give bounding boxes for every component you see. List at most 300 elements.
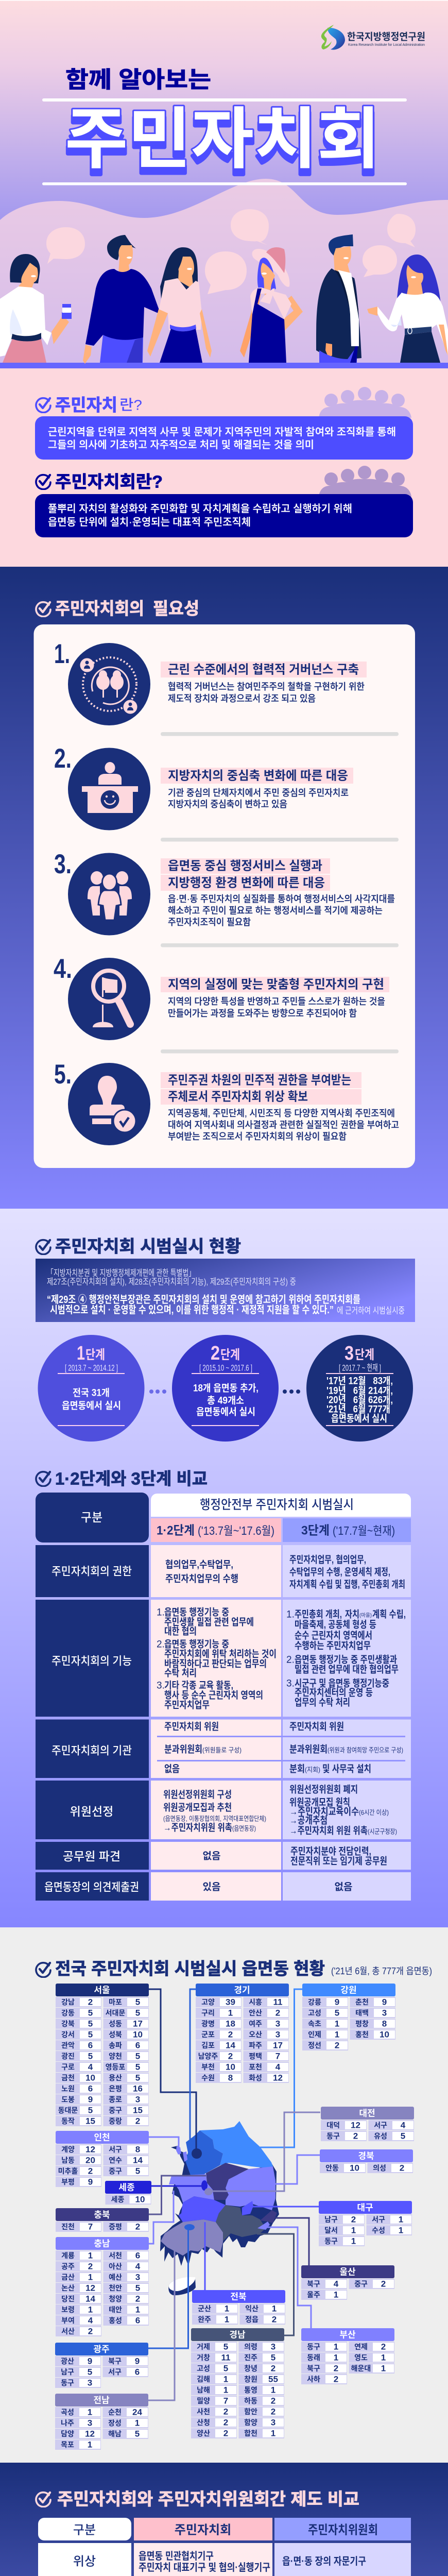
table: 서울: 용산 [109,2074,122,2082]
stage 1 circle: 읍면동에서 실시 [62,1400,121,1412]
table: 강원: 9 [335,1997,339,2007]
table: 충북: 진천 [61,2223,75,2231]
white card [34,624,415,1168]
table: 전북: 전북 [230,2292,247,2302]
row: right to submit opinions: 없음 [335,1882,352,1893]
table: 경남: 밀양 [197,2397,210,2405]
table: 경남: 2 [223,2417,228,2428]
item 2 [54,743,399,842]
table: 인천: 8 [135,2144,140,2155]
table: 대구: 대구 [357,2203,373,2212]
table: 경남: 5 [223,2364,228,2373]
table: 충남: 계룡 [61,2251,75,2260]
table: 인천: 5 [135,2166,140,2176]
table: 경기: 8 [228,2073,233,2082]
table: 인천: 부평 [61,2178,75,2186]
row: organs: (위원들로 구성) [202,1747,242,1754]
table: 경남: 합천 [244,2429,257,2437]
row: status [38,2543,411,2576]
map of Korea [160,2121,279,2295]
row: organs: 없음 [164,1763,180,1774]
panel: necessity [34,599,415,1168]
person 4 [240,247,303,363]
stage 2-3 dots [283,1389,300,1394]
table: 인천: 14 [133,2156,143,2165]
table: 경기: 화성 [249,2074,262,2082]
table: 경남: 의령 [244,2343,257,2351]
table: 대구: 1 [399,2226,403,2235]
table: 전북 [192,2290,285,2325]
table: 부산: 1 [334,2342,338,2351]
row: member selection: 위원공개모집 원칙 [289,1797,350,1808]
table: 인천: 남동 [61,2156,75,2164]
row: organs: 주민자치회 위원 [164,1721,219,1732]
table: 부산: 부산 [339,2330,356,2340]
legal basis box: 에 근거하여 시범실시중 [337,1306,405,1316]
table: 전남 [55,2394,148,2450]
table: 대전 [321,2107,414,2141]
table: 경북: 의성 [373,2164,386,2172]
table: 강원: 1 [335,2030,339,2039]
table: 충남: 2 [88,2327,93,2336]
table: 부산: 1 [381,2352,386,2363]
row: function: 기타 각종 교육 활동, [164,1680,233,1691]
table: 광주: 광주 [93,2344,110,2354]
comparison table [38,2518,411,2576]
row: dispatched officials: 없음 [203,1851,220,1862]
table header: 주민자치위원회 [308,2523,378,2537]
table: 울산: 울주 [307,2291,320,2299]
row: function: 자치 [345,1608,359,1620]
table: 충남: 논산 [61,2284,75,2292]
table: 대구: 서구 [372,2215,385,2224]
heading [36,599,199,618]
table: 경남: 사천 [197,2408,210,2416]
table: 경기: 경기 [234,1986,250,1995]
table header [38,2518,411,2540]
table: 광주: 서구 [108,2368,122,2376]
table: 충남: 1 [88,2272,93,2282]
table: 경남: 산청 [197,2418,210,2427]
table: 경남: 2 [223,2429,228,2438]
table: 경기: 18 [226,2019,235,2029]
table: 서울: 강서 [61,2030,75,2039]
row: function: 2. [286,1655,295,1665]
table: 경남 [191,2328,284,2438]
icon: stamp [68,1063,150,1145]
heading: 주민자치회의 [55,599,144,618]
table: 서울: 6 [88,2040,93,2050]
table: 충남: 태안 [109,2306,122,2314]
table: 서울: 중랑 [109,2117,122,2125]
table: 서울: 성동 [109,2020,122,2028]
table: 전북: 군산 [198,2304,211,2313]
table: 전남: 담양 [61,2430,74,2438]
table: 대전: 4 [401,2121,406,2130]
table: 충남: 부여 [61,2316,75,2325]
table: 광주: 9 [88,2357,92,2366]
table: 경남: 2 [271,2396,275,2406]
table: 부산: 1 [334,2352,338,2363]
table: 경남: 함안 [244,2408,257,2416]
row: dispatched officials [36,1842,411,1870]
row: status: 읍면동 민관협치기구 [139,2550,214,2562]
table: 충북: 증평 [109,2223,122,2231]
table: 세종: 10 [135,2195,145,2204]
row: function: 읍면동 행정기능 중 [164,1606,229,1618]
table: 경기 [196,1984,289,2083]
table: 경기: 3 [275,2019,280,2029]
table: 경기: 14 [226,2040,235,2050]
table: 강원: 태백 [355,2009,369,2017]
item 2: 2. [54,743,72,774]
table: 충남: 3 [135,2272,140,2282]
table: 충북: 2 [135,2222,140,2232]
table: 충남 [56,2237,149,2336]
row: function: 2. [157,1639,165,1650]
table: 인천: 9 [88,2177,93,2187]
row: function: 바람직하다고 판단되는 업무의 [164,1658,267,1669]
table: 경남: 2 [271,2407,275,2416]
table: 경남: 김해 [197,2375,210,2383]
table: 경남: 남해 [197,2386,210,2394]
table: 서울: 5 [88,2105,93,2115]
table: 충남: 예산 [109,2273,122,2281]
map: Jeju [168,2277,196,2295]
table: 서울: 강남 [61,1998,75,2006]
table: 서울: 15 [85,2116,95,2126]
row: organs: 주민자치회의 기관 [51,1744,132,1757]
stage 3 circle: 3 [344,1343,354,1364]
row: function: 1. [157,1607,165,1618]
table: 서울 [56,1984,149,2126]
table: 부산: 2 [334,2364,338,2373]
item 5 [54,1059,399,1145]
row: dispatched officials: 공무원 파견 [63,1850,120,1863]
table: 경기: 부천 [201,2063,215,2071]
table: 강원: 평창 [355,2020,369,2028]
table: 서울: 강북 [61,2020,75,2028]
row: function: 계획 수립, [372,1608,406,1620]
stage 2 circle: [ 2015.10 ~ 2017.6 ] [199,1363,252,1372]
table: 서울: 5 [135,2073,140,2082]
table: 대구: 동구 [324,2237,338,2245]
item 5: 5. [54,1059,72,1090]
table: 대구: 1 [351,2226,356,2235]
item 5: 부여받는 조직으로서 주민자치회의 위상이 필요함 [168,1131,347,1142]
table: 경남: 통영 [244,2386,257,2394]
table: 서울: 중구 [109,2106,122,2114]
heading: 전국 주민자치회 시범실시 읍면동 현황 [55,1959,325,1978]
table: 경남: 2 [271,2364,275,2373]
table: 광주: 9 [135,2357,140,2366]
table: 충남: 4 [135,2262,141,2271]
table: 강원: 1 [335,2019,339,2029]
table: 경기: 군포 [201,2030,215,2039]
table: 경기: 남양주 [198,2052,218,2060]
table: 대구: 달서 [324,2226,338,2234]
icon: person at desk [68,748,150,831]
table: 대구: 2 [351,2214,356,2225]
table: 강원: 2 [335,2040,339,2050]
table: 강원: 5 [335,2008,339,2018]
row: member selection: (6시간 이상) [359,1808,389,1817]
item 5: 대하여 지역사회내 의사결정과 관련한 실질적인 권한을 부여하고 [168,1120,399,1130]
table: 대전: 2 [353,2131,358,2141]
row: member selection: (읍면동장, 이통장협의회, 지역대표연합단체) [163,1815,266,1823]
item 4: 지역의 다양한 특성을 반영하고 주민들 스스로가 원하는 것을 [168,996,385,1007]
row: function: 행사 등 순수 근린자치 영역의 [164,1690,263,1701]
table: 충남: 5 [135,2283,140,2293]
icon: three residents [68,853,150,936]
table: 대전: 12 [351,2121,360,2130]
item 2: 기관 중심의 단체자치에서 주민 중심의 주민자치로 [168,788,349,798]
item 1: 근린 수준에서의 협력적 거버넌스 구축 [168,663,359,677]
heading: 필요성 [153,599,199,618]
table: 경남: 55 [268,2374,278,2384]
table: 전남: 목포 [61,2441,74,2449]
table: 충남: 보령 [61,2306,75,2314]
table: 경기: 39 [226,1997,235,2007]
table header: 3단계 [301,1524,330,1537]
table: 경기: 7 [275,2052,280,2061]
row: organs: 및 사무국 설치 [322,1763,371,1774]
table: 강원: 8 [382,2019,387,2029]
row: member selection: 위원공개모집과 추천 [163,1802,232,1814]
stage 2 circle: 2 [211,1343,220,1364]
stage 1 circle: [ 2013.7 ~ 2014.12 ] [65,1363,118,1372]
table: 서울: 강동 [61,2009,75,2017]
item 1: 1. [54,639,70,669]
row: right to submit opinions: 읍면동장의 의견제출권 [44,1880,139,1894]
item 4: 만들어가는 과정을 도와주는 방향으로 추진되어야 함 [168,1008,357,1019]
row: dispatched officials: 주민자치분야 전담인력, [290,1845,371,1857]
table: 경기: 여주 [249,2020,262,2028]
table: 강원: 인제 [308,2030,321,2039]
table: 전남: 1 [88,2407,92,2417]
table: 서울: 3 [135,2095,140,2104]
table: 경남: 2 [223,2407,228,2416]
row: function: 수탁 처리 [164,1667,197,1679]
table: 경북 [320,2149,413,2173]
title: 주민자치회 [65,101,380,177]
table: 전남: 1 [88,2440,92,2449]
table: 인천: 20 [85,2156,95,2165]
stage 3 circle: '17년 12월 83개, [326,1376,393,1387]
row: organs: (위원과 참여희망 주민으로 구성) [328,1747,403,1754]
item 2: 지방자치의 중심축 변화에 따른 대응 [168,769,348,783]
table: 서울: 16 [133,2083,143,2094]
legal basis box: 「지방자치분권 및 지방행정체제개편에 관한 특별법」 [47,1268,195,1278]
row: organs: 주민자치회 위원 [289,1721,344,1732]
table: 인천: 12 [85,2144,95,2155]
table: 서울: 6 [135,2040,140,2050]
table: 경남: 창녕 [244,2364,257,2372]
table header: ('13.7월~'17.6월) [198,1524,274,1537]
table: 충남: 서산 [61,2327,75,2335]
panel: definitions [35,387,413,537]
person 2 [83,235,161,364]
table: 충남: 6 [135,2250,140,2261]
table header: 구분 [81,1511,102,1524]
logo: 한국지방행정연구원 [321,25,425,50]
item 4: 4. [54,954,72,984]
table: 충남: 홍성 [109,2316,122,2325]
table: 서울: 은평 [109,2084,122,2093]
table: 부산: 사하 [307,2375,320,2383]
table: 강원: 홍천 [355,2030,369,2039]
subtitle: 함께 알아보는 [65,67,211,93]
row: authority: 협의업무,수탁업무, [165,1559,233,1570]
row: function: 밀접 관련 업무에 대한 협의업무 [295,1664,399,1675]
table: 부산: 2 [334,2374,338,2384]
table header: 주민자치회 [175,2523,231,2537]
table: 경남: 고성 [197,2364,210,2372]
table: 강원: 3 [382,2008,387,2018]
table: 서울: 동작 [61,2117,75,2125]
table: 부산: 해운대 [351,2364,371,2372]
table: 서울: 5 [135,2052,140,2061]
table: 경남: 진주 [244,2353,257,2362]
table: 경기: 구리 [201,2009,215,2017]
title: 주민자치회 [65,108,380,183]
table: 전남: 해남 [108,2430,122,2438]
table: 인천: 연수 [109,2156,122,2164]
table: 충남: 청양 [109,2295,122,2303]
table: 서울: 영등포 [106,2063,125,2071]
table: 대구: 수성 [372,2226,385,2234]
table: 서울: 5 [135,2008,140,2018]
row: function: 읍면동 행정기능 중 [164,1638,229,1650]
table: 서울: 6 [88,2083,93,2094]
table: 부산 [301,2328,394,2384]
table: 경북: 안동 [325,2164,339,2172]
table: 전남: 12 [85,2429,95,2439]
table: 대전: 대전 [359,2108,375,2119]
table: 대구: 남구 [324,2215,338,2224]
table: 서울: 2 [135,2116,140,2126]
table header: 1·2단계 [157,1524,195,1537]
heading: 주민자치회 시범실시 현황 [55,1236,241,1256]
item 3: 읍·면·동 주민자치의 실질화를 통하여 행정서비스의 사각지대를 [168,894,395,904]
table: 경남: 거제 [197,2343,210,2351]
person 5 [316,234,361,363]
table: 서울: 광진 [61,2052,75,2060]
row: member selection: 위원선정위원회 구성 [163,1789,232,1800]
table: 경기: 1 [228,2008,233,2018]
table: 전남: 나주 [61,2419,74,2427]
table: 충북: 7 [88,2222,93,2232]
주민자치회란 text box: 풀뿌리 자치의 활성화와 주민화합 및 자치계획을 수립하고 실행하기 위해 [48,503,352,515]
table: 경기: 12 [273,2073,283,2082]
table: 전북: 1 [272,2304,277,2313]
table: 부산: 연제 [354,2343,368,2351]
table: 경기: 4 [275,2062,281,2072]
table: 충남: 공주 [61,2262,75,2270]
row: function: 수행하는 주민자치업무 [295,1640,371,1652]
table: 경남: 양산 [197,2429,210,2437]
speech bubbles [46,209,416,294]
table: 서울: 송파 [109,2041,122,2049]
table: 경북: 2 [400,2163,404,2173]
table: 경남: 경남 [229,2330,246,2340]
table: 경기: 2 [228,2030,233,2039]
person 3 [147,247,212,363]
table: 충남: 14 [85,2294,95,2304]
table: 서울: 5 [88,2052,93,2061]
table: 울산: 4 [334,2279,339,2289]
row: status: 주민자치 대표기구 및 협의·실행기구 [139,2562,270,2573]
table: 전북: 2 [272,2314,277,2325]
table: 인천: 2 [88,2166,93,2176]
table: 서울: 관악 [61,2041,75,2049]
table: 경기: 수원 [201,2074,215,2082]
row: organs [36,1720,411,1778]
table: 서울: 구로 [61,2063,75,2071]
row: function [36,1600,411,1717]
table: 강원: 고성 [308,2009,321,2017]
table: 서울: 15 [133,2105,143,2115]
주민자치란 heading: 란? [119,397,142,413]
table: 강원: 정선 [308,2041,321,2049]
background wave [0,179,448,363]
table: 광주: 6 [135,2367,140,2377]
row: status: 읍·면·동 장의 자문기구 [282,2555,366,2567]
table: 충북: 충북 [94,2210,110,2219]
table: 경남: 1 [223,2374,228,2384]
table: 강원: 강원 [340,1986,357,1995]
주민자치란 heading: 주민자치 [55,396,117,414]
table: 전북: 익산 [245,2304,259,2313]
stage 3 circle: '20년 6월 626개, [326,1394,393,1405]
panel: system comparison [36,2489,411,2576]
table: 경기: 10 [226,2062,235,2072]
row: member selection: →주민자치교육이수 [289,1806,359,1818]
row: member selection [36,1781,411,1839]
table: 충남: 12 [85,2283,95,2293]
logo: 한국지방행정연구원: 한국지방행정연구원 [347,31,425,42]
table: 경남: 1 [223,2385,228,2395]
table: 광주: 동구 [61,2379,74,2387]
heading: ('21년 6월, 총 777개 읍면동) [331,1966,432,1976]
table: 전북: 정읍 [245,2315,259,2324]
row: member selection: (읍면동장) [232,1825,256,1832]
table: 서울: 마포 [109,1998,122,2006]
table: 부산: 동구 [307,2343,320,2351]
heading: 1·2단계와 3단계 비교 [55,1469,208,1488]
table: 서울: 5 [88,2030,93,2039]
table: 경남: 하동 [244,2397,257,2405]
table: 대구: 1 [351,2236,356,2246]
table: 울산: 1 [334,2290,338,2300]
주민자치회란 text box [35,494,413,537]
panel: hero [0,25,448,364]
table: 서울: 서울 [94,1986,110,1995]
table header: ('17.7월~현재) [333,1524,395,1537]
table: 경기: 안산 [249,2009,262,2017]
table: 경기: 고양 [201,1998,215,2006]
table: 충남: 1 [88,2305,93,2314]
table: 충남: 아산 [109,2262,122,2270]
table: 부산: 영도 [354,2353,368,2362]
table: 강원: 속초 [308,2020,321,2028]
row: right to submit opinions: 있음 [203,1882,220,1893]
row: organs: 분회 [289,1763,305,1774]
table: 경남: 5 [271,2352,275,2363]
table: 전남: 1 [135,2418,140,2428]
stage 2 circle: 총 49개소 [207,1395,244,1406]
table: 경기: 3 [275,2030,280,2039]
